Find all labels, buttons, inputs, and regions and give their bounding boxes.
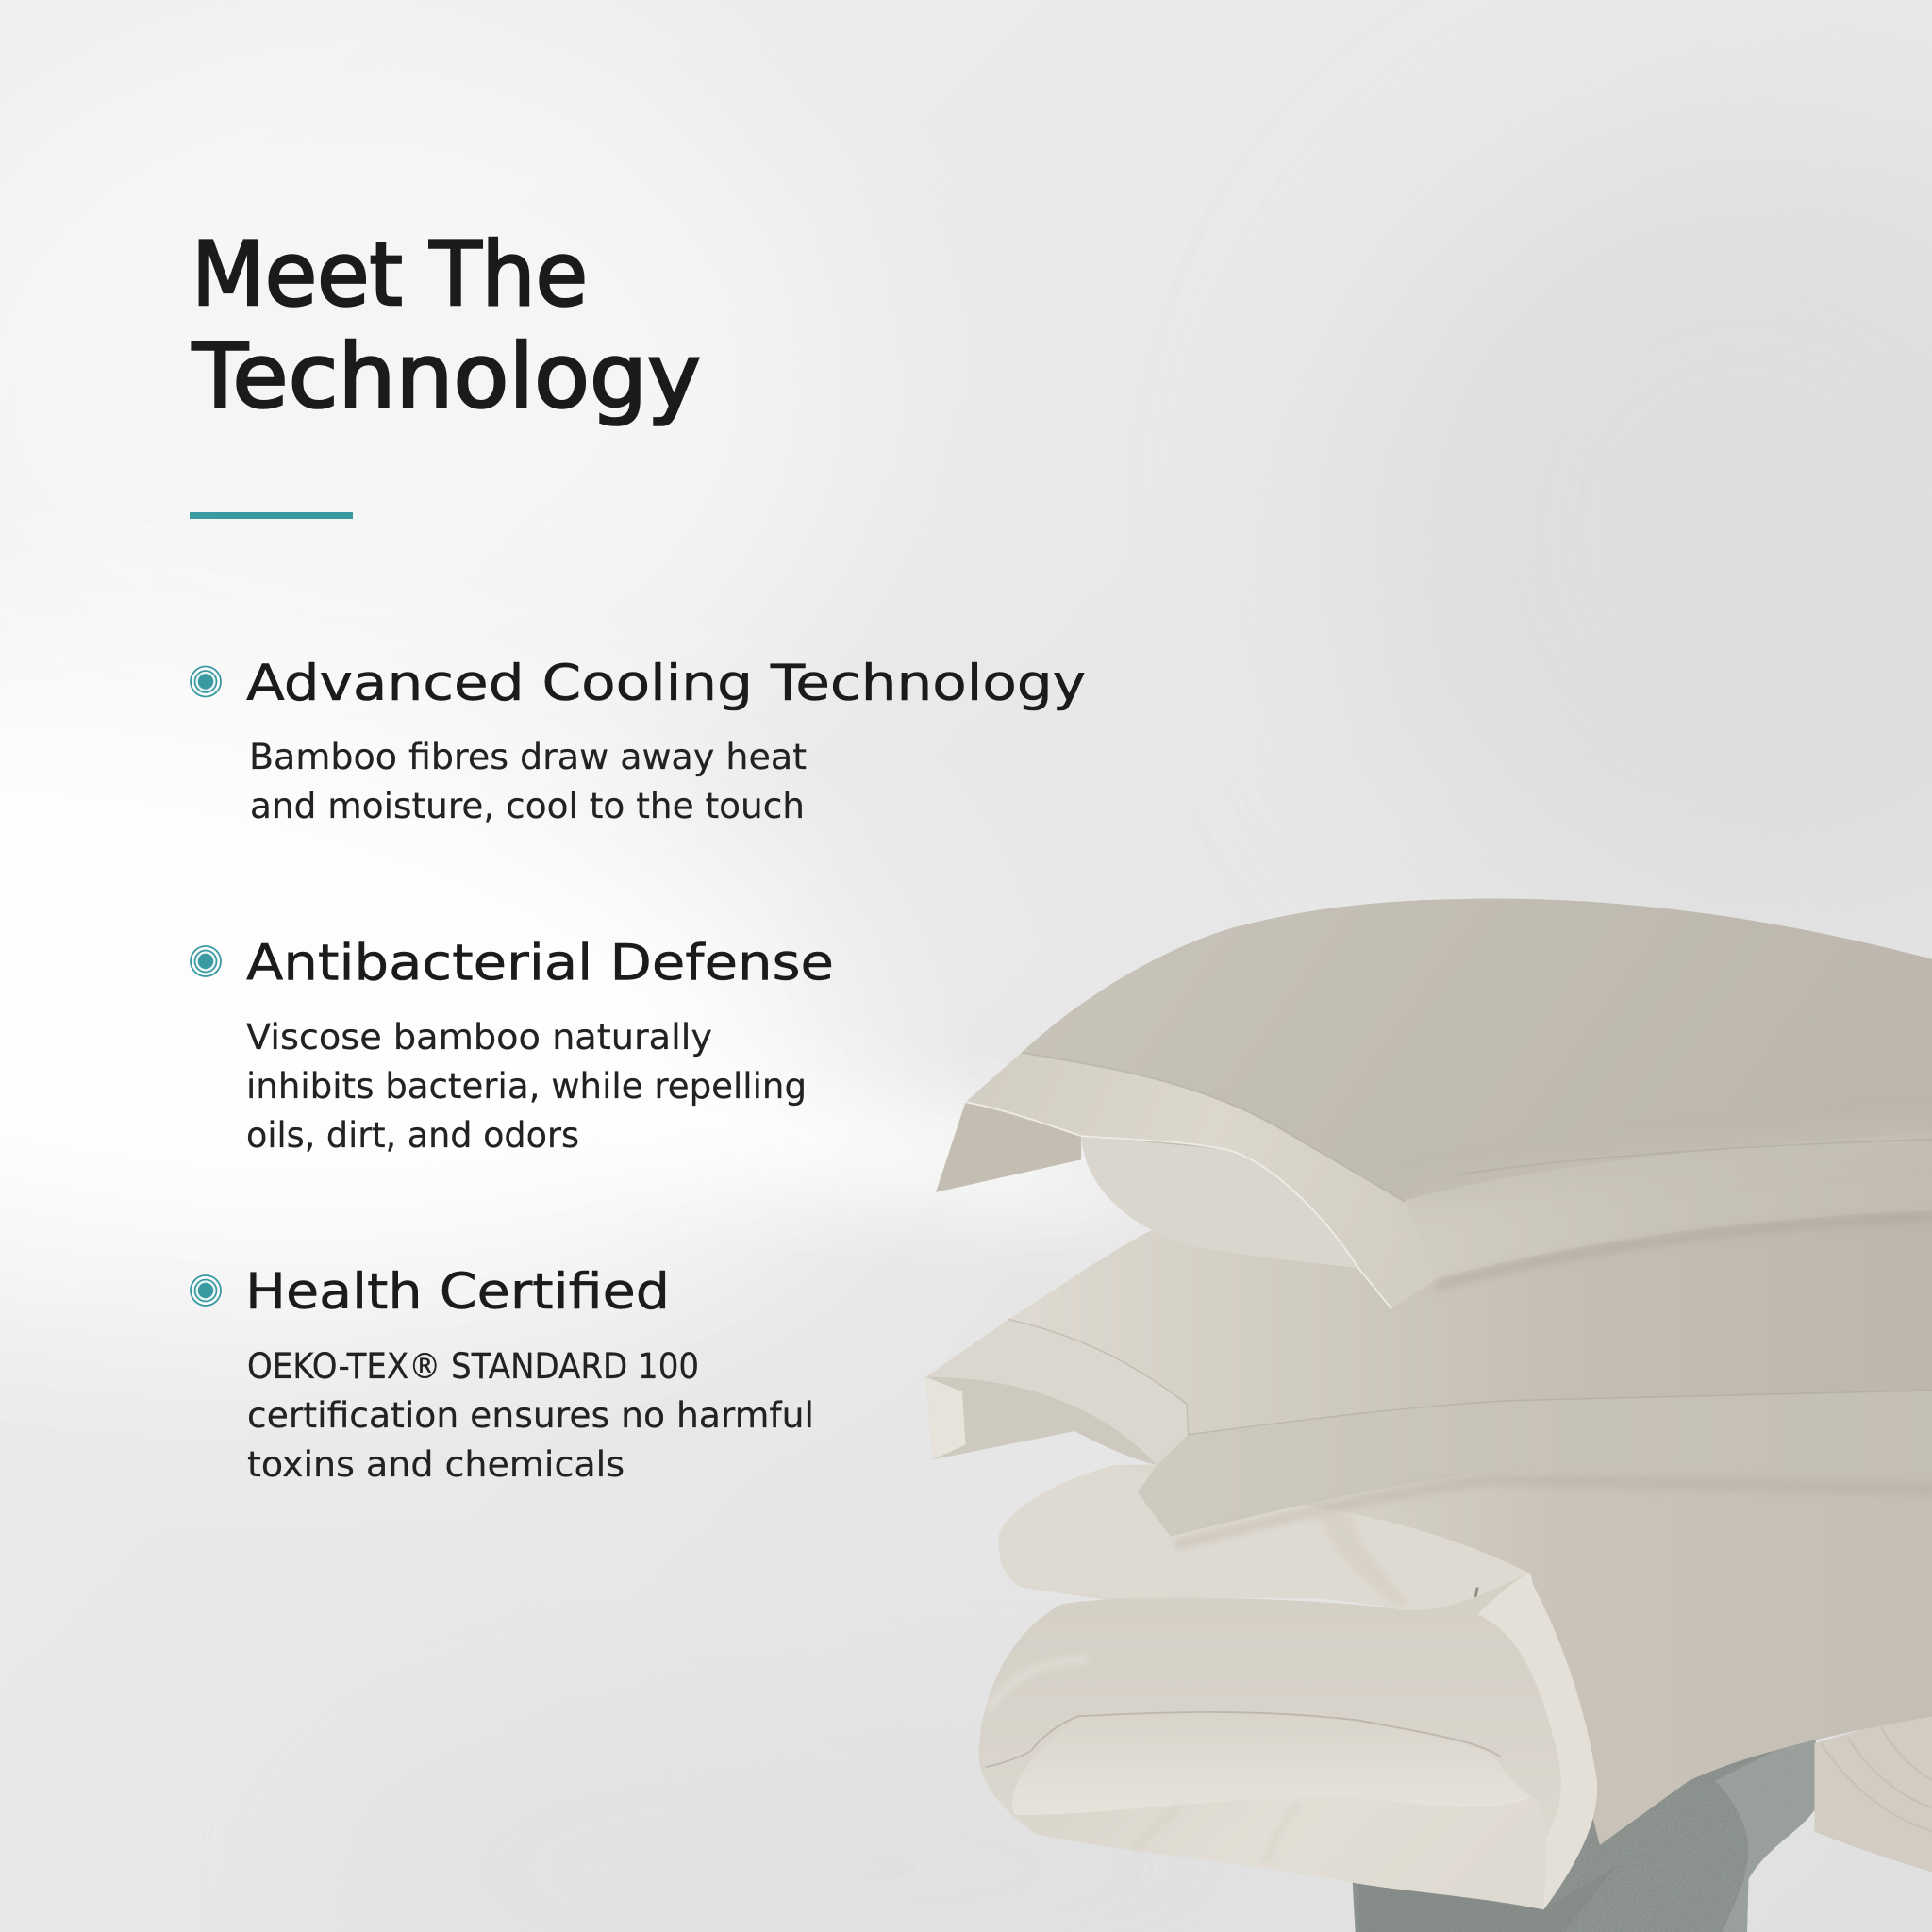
text block: cooling description [249,737,807,826]
text block: certification description: OEKO-TEX® STANDARD 100 [247,1346,699,1387]
icon: teal target bullet [191,666,221,696]
heading: antibacterial defense: Antibacterial Defense [246,934,834,992]
icon: teal target bullet [191,946,221,976]
upper pillow: underside flap [936,1102,1081,1192]
text block: antibacterial description: oils, dirt, and odors [246,1115,579,1156]
upper pillow: main body [966,898,1932,1309]
upper pillow [936,898,1932,1309]
feature: advanced cooling technology [191,655,1086,826]
text block: certification description [247,1346,814,1485]
duvet: back fold with pleats [1814,1709,1932,1873]
product photo: stacked bedding on stone stand [926,898,1932,1932]
text block: certification description: certification ensures no harmful [247,1395,814,1436]
title [192,224,701,428]
duvet: front roll [978,1574,1597,1909]
heading: advanced cooling technology: Advanced Cooling Technology [246,655,1086,712]
upper pillow: soft under body [1081,1136,1398,1268]
text block: antibacterial description [246,1017,807,1156]
feature: health certified [191,1263,814,1485]
stone pedestal [1352,1730,1816,1932]
upper pillow: hem shade [1391,1133,1932,1309]
upper pillow: flap band [966,1053,1438,1309]
feature: antibacterial defense [191,934,834,1156]
text block: cooling description: Bamboo fibres draw away heat [249,737,807,777]
lower pillow: inside flap shadow [926,1377,1158,1465]
title: Meet The [192,224,588,326]
heading: health certified: Health Certified [245,1263,670,1321]
lower pillow: flap top [926,1319,1189,1465]
lower pillow: body [1008,1187,1932,1537]
text block: certification description: toxins and chemicals [247,1444,625,1485]
upper pillow: soft blend from body to hem [1398,1119,1932,1214]
lower pillow: hem [1138,1391,1932,1537]
title: Technology [192,325,701,428]
teal divider bar [190,512,353,519]
icon: teal target bullet [191,1275,221,1306]
text block: cooling description: and moisture, cool to the touch [250,786,805,826]
text block: antibacterial description: Viscose bamboo naturally [246,1017,712,1058]
duvet: top layer [999,1452,1932,1845]
text block: antibacterial description: inhibits bacteria, while repelling [246,1066,807,1107]
lower pillow [926,1187,1932,1550]
